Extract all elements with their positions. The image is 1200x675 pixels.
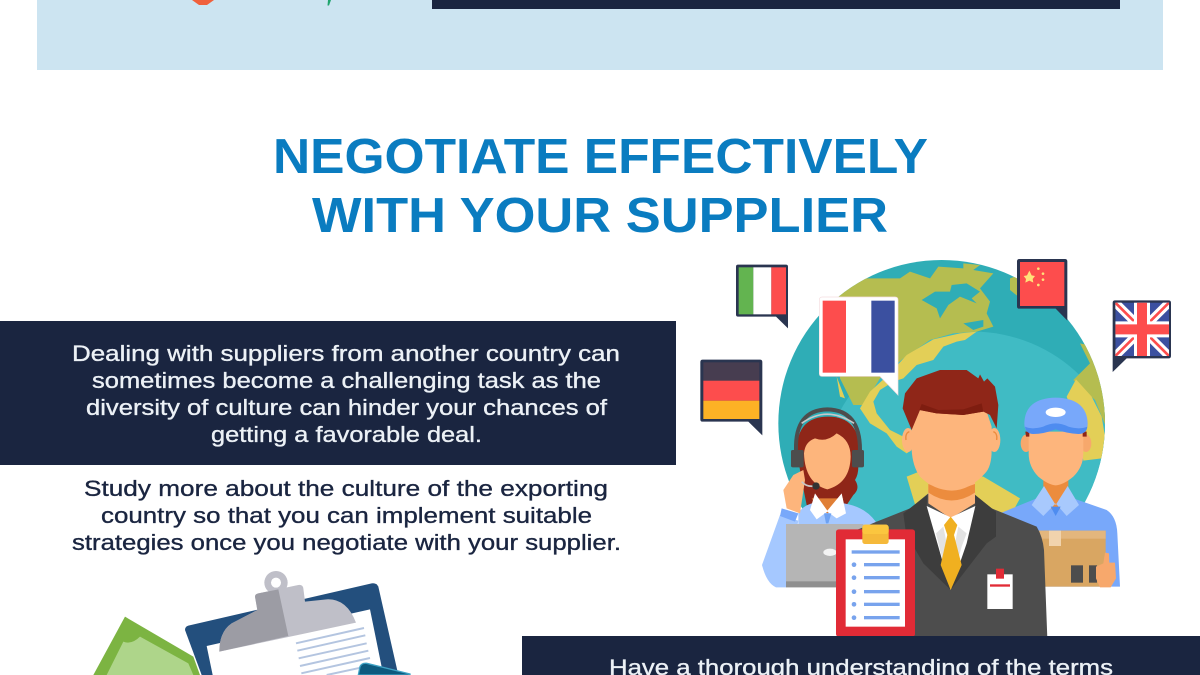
flag: China (1017, 259, 1067, 321)
text block: study the culture: country so that you can implement suitable (101, 503, 592, 528)
illustration: clipboard and money (93, 571, 410, 675)
icon fragment: green (328, 0, 331, 6)
text block: study the culture: Study more about the culture of the exporting (84, 476, 608, 501)
illustration: globe, flags and people (700, 257, 1171, 638)
title: NEGOTIATE EFFECTIVELY (273, 130, 928, 184)
intro text (72, 341, 620, 447)
text block: study the culture: strategies once you negotiate with your supplier. (72, 530, 621, 555)
panel: intro text banner (0, 321, 676, 465)
figure: call centre agent (762, 409, 877, 587)
flag: Italy (736, 265, 788, 328)
intro text: sometimes become a challenging task as the (92, 368, 601, 393)
globe (778, 260, 1105, 522)
top panel: light blue band (37, 0, 1163, 70)
text block: study the culture (72, 476, 621, 555)
panel: terms banner (522, 636, 1200, 675)
small teal card (358, 663, 410, 675)
icon fragment: red (192, 0, 214, 5)
headset (791, 409, 864, 490)
clipboard board (185, 571, 410, 675)
flag: France (819, 297, 898, 395)
title (273, 130, 928, 243)
intro text: getting a favorable deal. (211, 422, 482, 447)
title: WITH YOUR SUPPLIER (312, 189, 888, 243)
clipboard (836, 525, 915, 637)
banknote (93, 617, 200, 675)
badge (987, 569, 1013, 609)
intro text: diversity of culture can hinder your chances of (86, 395, 608, 420)
laptop (786, 524, 863, 587)
flag: Germany (700, 360, 762, 435)
intro text: Dealing with suppliers from another country can (72, 341, 620, 366)
figure: delivery worker (1000, 398, 1120, 587)
parcel box (1037, 531, 1116, 587)
figure: businessman (836, 370, 1047, 638)
flag: United Kingdom (1113, 300, 1171, 372)
clip (264, 571, 288, 594)
top dark bar (432, 0, 1120, 9)
